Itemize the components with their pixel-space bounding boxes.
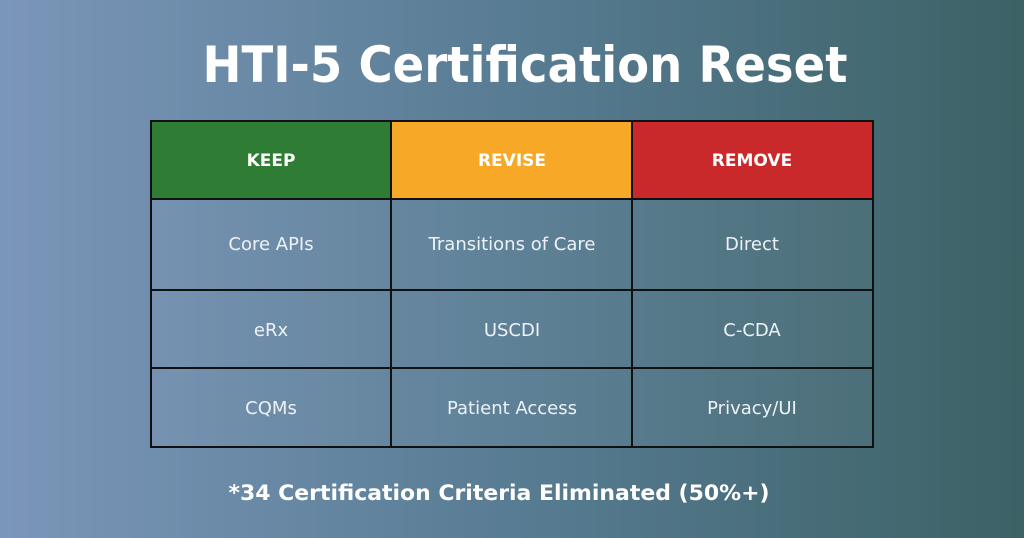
row 2: eRx [254,320,288,341]
title: HTI-5 Certification Reset [202,36,848,94]
table [151,121,873,447]
row 3: Patient Access [447,398,577,419]
header: keep: KEEP [247,151,295,171]
row 3: CQMs [245,398,297,419]
row 1: Transitions of Care [428,234,595,255]
row 1: Core APIs [228,234,314,255]
header: remove: REMOVE [712,151,792,171]
footer note: *34 Certification Criteria Eliminated (50%+) [228,481,770,505]
row 3 [245,398,797,419]
row 2: USCDI [484,320,540,341]
header: revise: REVISE [478,151,546,171]
header: remove [632,121,873,199]
header: keep [151,121,391,199]
row 1: Direct [725,234,779,255]
row 2 [254,320,781,341]
row 2: C-CDA [723,320,781,341]
row 3: Privacy/UI [707,398,797,419]
header: revise [391,121,632,199]
row 1 [228,234,779,255]
